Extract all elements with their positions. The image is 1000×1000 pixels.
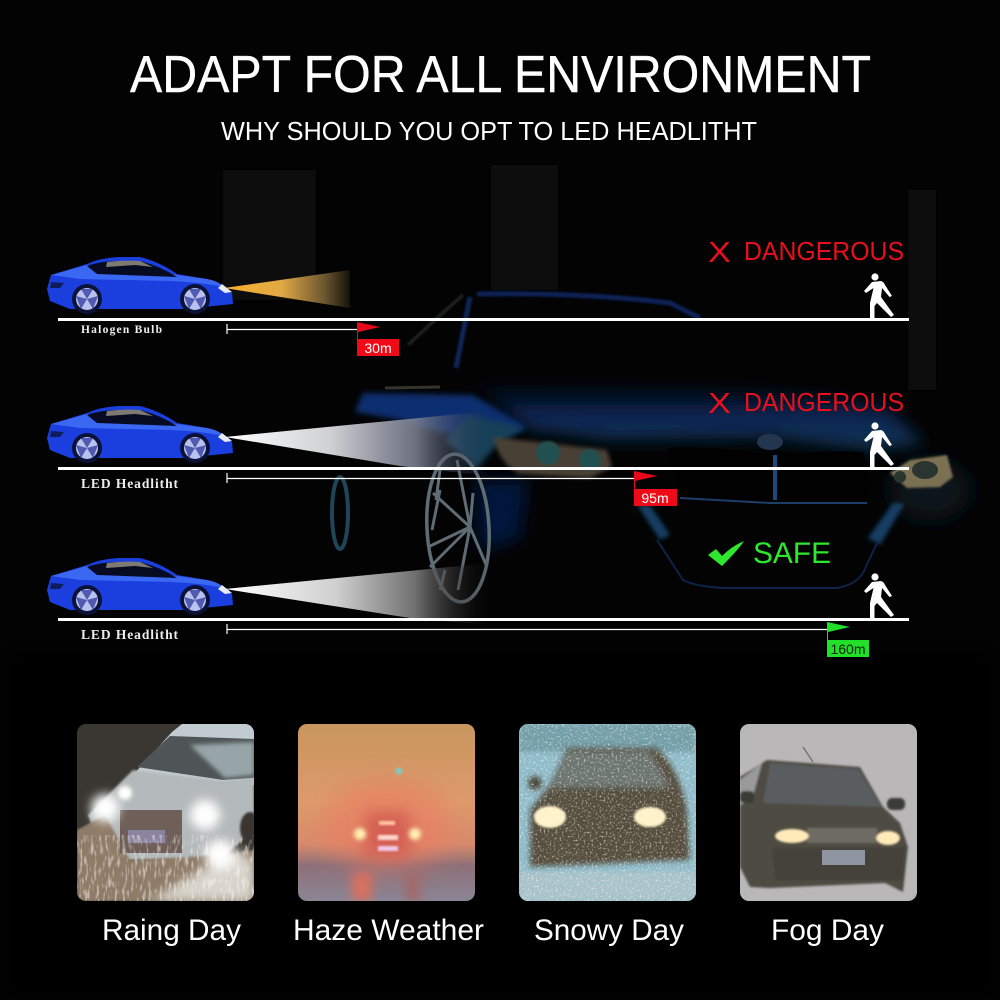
row: LED 160m [47,537,909,657]
grille [667,448,770,502]
row: LED 95m [47,387,909,506]
blue car [47,257,233,314]
title: ADAPT FOR ALL ENVIRONMENT [130,45,871,103]
road line [58,318,909,321]
LED label: LED Headlitht [81,476,178,491]
caption: raing day: Raing Day [102,914,241,947]
badge [757,434,783,450]
warning: X [708,388,731,420]
distance rule [227,473,634,483]
photo: rainy day [77,724,260,901]
distance rule [227,624,827,634]
roof edge [477,294,700,318]
distance tag [634,489,677,506]
photo: fog day [740,724,917,901]
white beam [225,563,490,625]
LED label: LED Headlitht [81,627,178,642]
row: halogen bulb 30m [47,236,909,356]
photo: snowy day [519,724,696,901]
background car: dark blue BMW [332,294,970,604]
pedestrian [864,573,894,618]
flag [357,322,380,339]
distance tag [827,640,869,657]
front wheel [423,452,493,604]
row: LED 160m: 160m [830,641,866,657]
left headlight [493,437,612,478]
hood [465,378,925,450]
white beam [225,411,490,476]
distance rule [227,324,357,334]
flag [634,471,657,489]
blue car [47,406,233,463]
pedestrian [864,422,894,467]
road line [58,618,909,621]
a-pillar [456,297,470,368]
flag [827,622,850,640]
rear wheel [332,477,348,549]
caption: snowy day: Snowy Day [534,914,684,947]
safe label: SAFE [753,537,831,570]
warning: X [708,237,731,269]
bulb label: Halogen Bulb [81,324,162,336]
row: halogen bulb 30m: 30m [364,340,392,356]
amber beam [224,270,350,308]
check icon [708,541,744,566]
row: LED 95m: DANGEROUS [744,387,904,417]
lower body [475,480,528,550]
left fender [355,393,527,443]
lower intake outline [657,540,877,588]
row: halogen bulb 30m: DANGEROUS [744,236,904,266]
distance tag [357,339,399,356]
road line [58,467,909,470]
bumper highlights [637,505,670,540]
caption: fog day: Fog Day [771,914,884,947]
pedestrian [864,273,894,318]
photo: haze weather [298,724,475,901]
blue car [47,558,233,615]
caption: haze weather: Haze Weather [293,914,484,947]
row: LED 95m: 95m [641,490,669,506]
subtitle: WHY SHOULD YOU OPT TO LED HEADLITHT [221,118,757,146]
right headlight [890,460,970,520]
